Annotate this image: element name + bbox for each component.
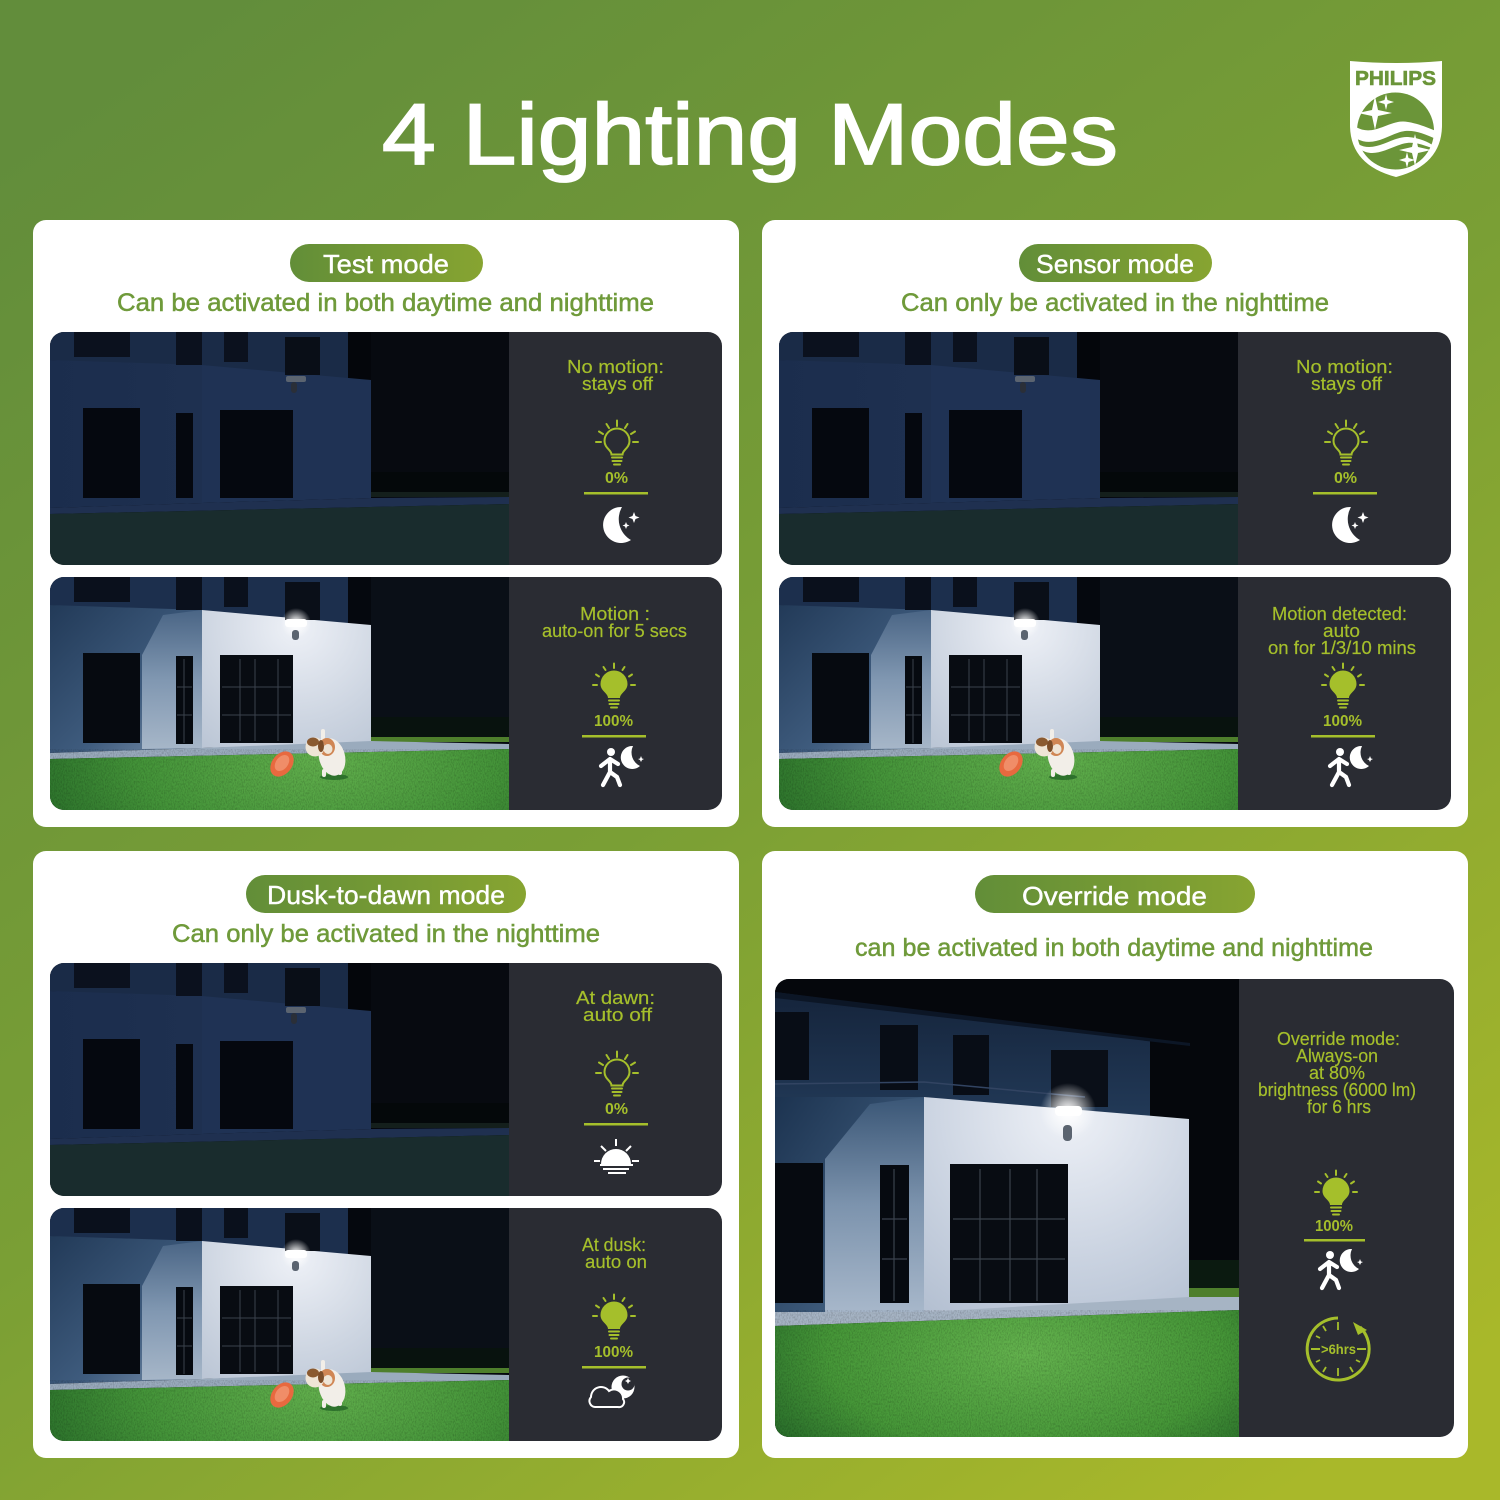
icon: bulb off [596,1052,638,1096]
text: motion detected: Motion detected: [1272,604,1407,624]
panel: dusk-to-dawn mode [33,851,739,1458]
text: motion auto-on [542,604,687,641]
icon: cloud and moon [582,1366,646,1407]
scene: sensor mode motion [779,577,1451,810]
text: at dusk auto on: auto on [585,1252,647,1272]
text: override description [1258,1029,1416,1117]
text: override description: brightness (6000 lm) [1258,1080,1416,1100]
scene: sensor mode no motion [779,332,1451,565]
subtitle: sensor mode: Can only be activated in the nighttime [901,289,1329,317]
text: brightness 100 percent: 100% [1315,1218,1353,1235]
icon: bulb on [593,664,635,708]
subtitle: test mode: Can be activated in both daytime and nighttime [117,289,654,317]
text: motion detected [1268,604,1416,658]
logo: Philips shield: PHILIPS [1355,68,1436,90]
scene: override house [775,979,1454,1437]
icon: bulb on [1315,1170,1357,1214]
icon: bulb on [593,1294,635,1338]
heading: sensor mode pill: Sensor mode [1036,249,1194,279]
text: override description: Always-on [1296,1046,1378,1066]
text: no motion stays off [1296,357,1393,394]
text: brightness 100 percent: 100% [1323,713,1362,730]
text: motion auto-on: Motion : [580,604,650,624]
heading: sensor mode pill [1019,244,1212,282]
text: brightness 0 percent: 0% [1334,470,1357,487]
icon: clock over 6 hours [1307,1318,1369,1380]
title: 4 Lighting Modes [382,87,1118,183]
text: brightness 100 percent: 100% [594,713,633,730]
text: no motion stays off: No motion: [1296,357,1393,377]
icon: walker and moon [1311,735,1375,785]
icon: bulb on [1322,664,1364,708]
text: no motion stays off: stays off [582,374,654,394]
text: override description: at 80% [1309,1063,1365,1083]
text: at dawn auto off: auto off [583,1005,653,1025]
text: brightness 0 percent: 0% [605,470,628,487]
text: at dusk auto on: At dusk: [582,1235,646,1255]
icon: bulb off [1325,420,1367,464]
text: brightness 100 percent: 100% [594,1344,633,1361]
text: at dawn auto off: At dawn: [576,988,655,1008]
text: at dusk auto on [582,1235,647,1272]
icon: moon [584,492,648,543]
scene: test mode motion [50,577,722,810]
text: override description: Override mode: [1277,1029,1400,1049]
scene: dusk [50,1208,722,1441]
icon: sunrise [584,1123,648,1173]
icon: moon [1313,492,1377,543]
subtitle: override mode: can be activated in both daytime and nighttime [855,934,1373,962]
text: motion detected: auto [1323,621,1360,641]
icon: walker and moon [582,735,646,785]
text: no motion stays off [567,357,664,394]
panel: override mode [762,851,1468,1458]
icon: bulb off [596,420,638,464]
heading: test mode pill [290,244,483,282]
text: motion detected: on for 1/3/10 mins [1268,638,1416,658]
heading: dusk-to-dawn pill: Dusk-to-dawn mode [267,880,505,910]
heading: override mode pill: Override mode [1022,881,1207,911]
panel: sensor mode [762,220,1468,827]
text: motion auto-on: auto-on for 5 secs [542,621,687,641]
heading: override mode pill [975,875,1255,913]
icon: clock over 6 hours: >6hrs [1321,1341,1356,1357]
heading: dusk-to-dawn pill [246,875,526,913]
text: at dawn auto off [576,988,655,1025]
logo: Philips shield [1350,61,1442,177]
panel: test mode [33,220,739,827]
text: no motion stays off: stays off [1311,374,1383,394]
text: brightness 0 percent: 0% [605,1101,628,1118]
text: override description: for 6 hrs [1307,1097,1371,1117]
text: no motion stays off: No motion: [567,357,664,377]
heading: test mode pill: Test mode [323,249,449,279]
scene: test mode no motion [50,332,722,565]
icon: walker and moon [1304,1239,1365,1288]
scene: dawn [50,963,722,1196]
subtitle: dusk-to-dawn: Can only be activated in the nighttime [172,920,600,948]
